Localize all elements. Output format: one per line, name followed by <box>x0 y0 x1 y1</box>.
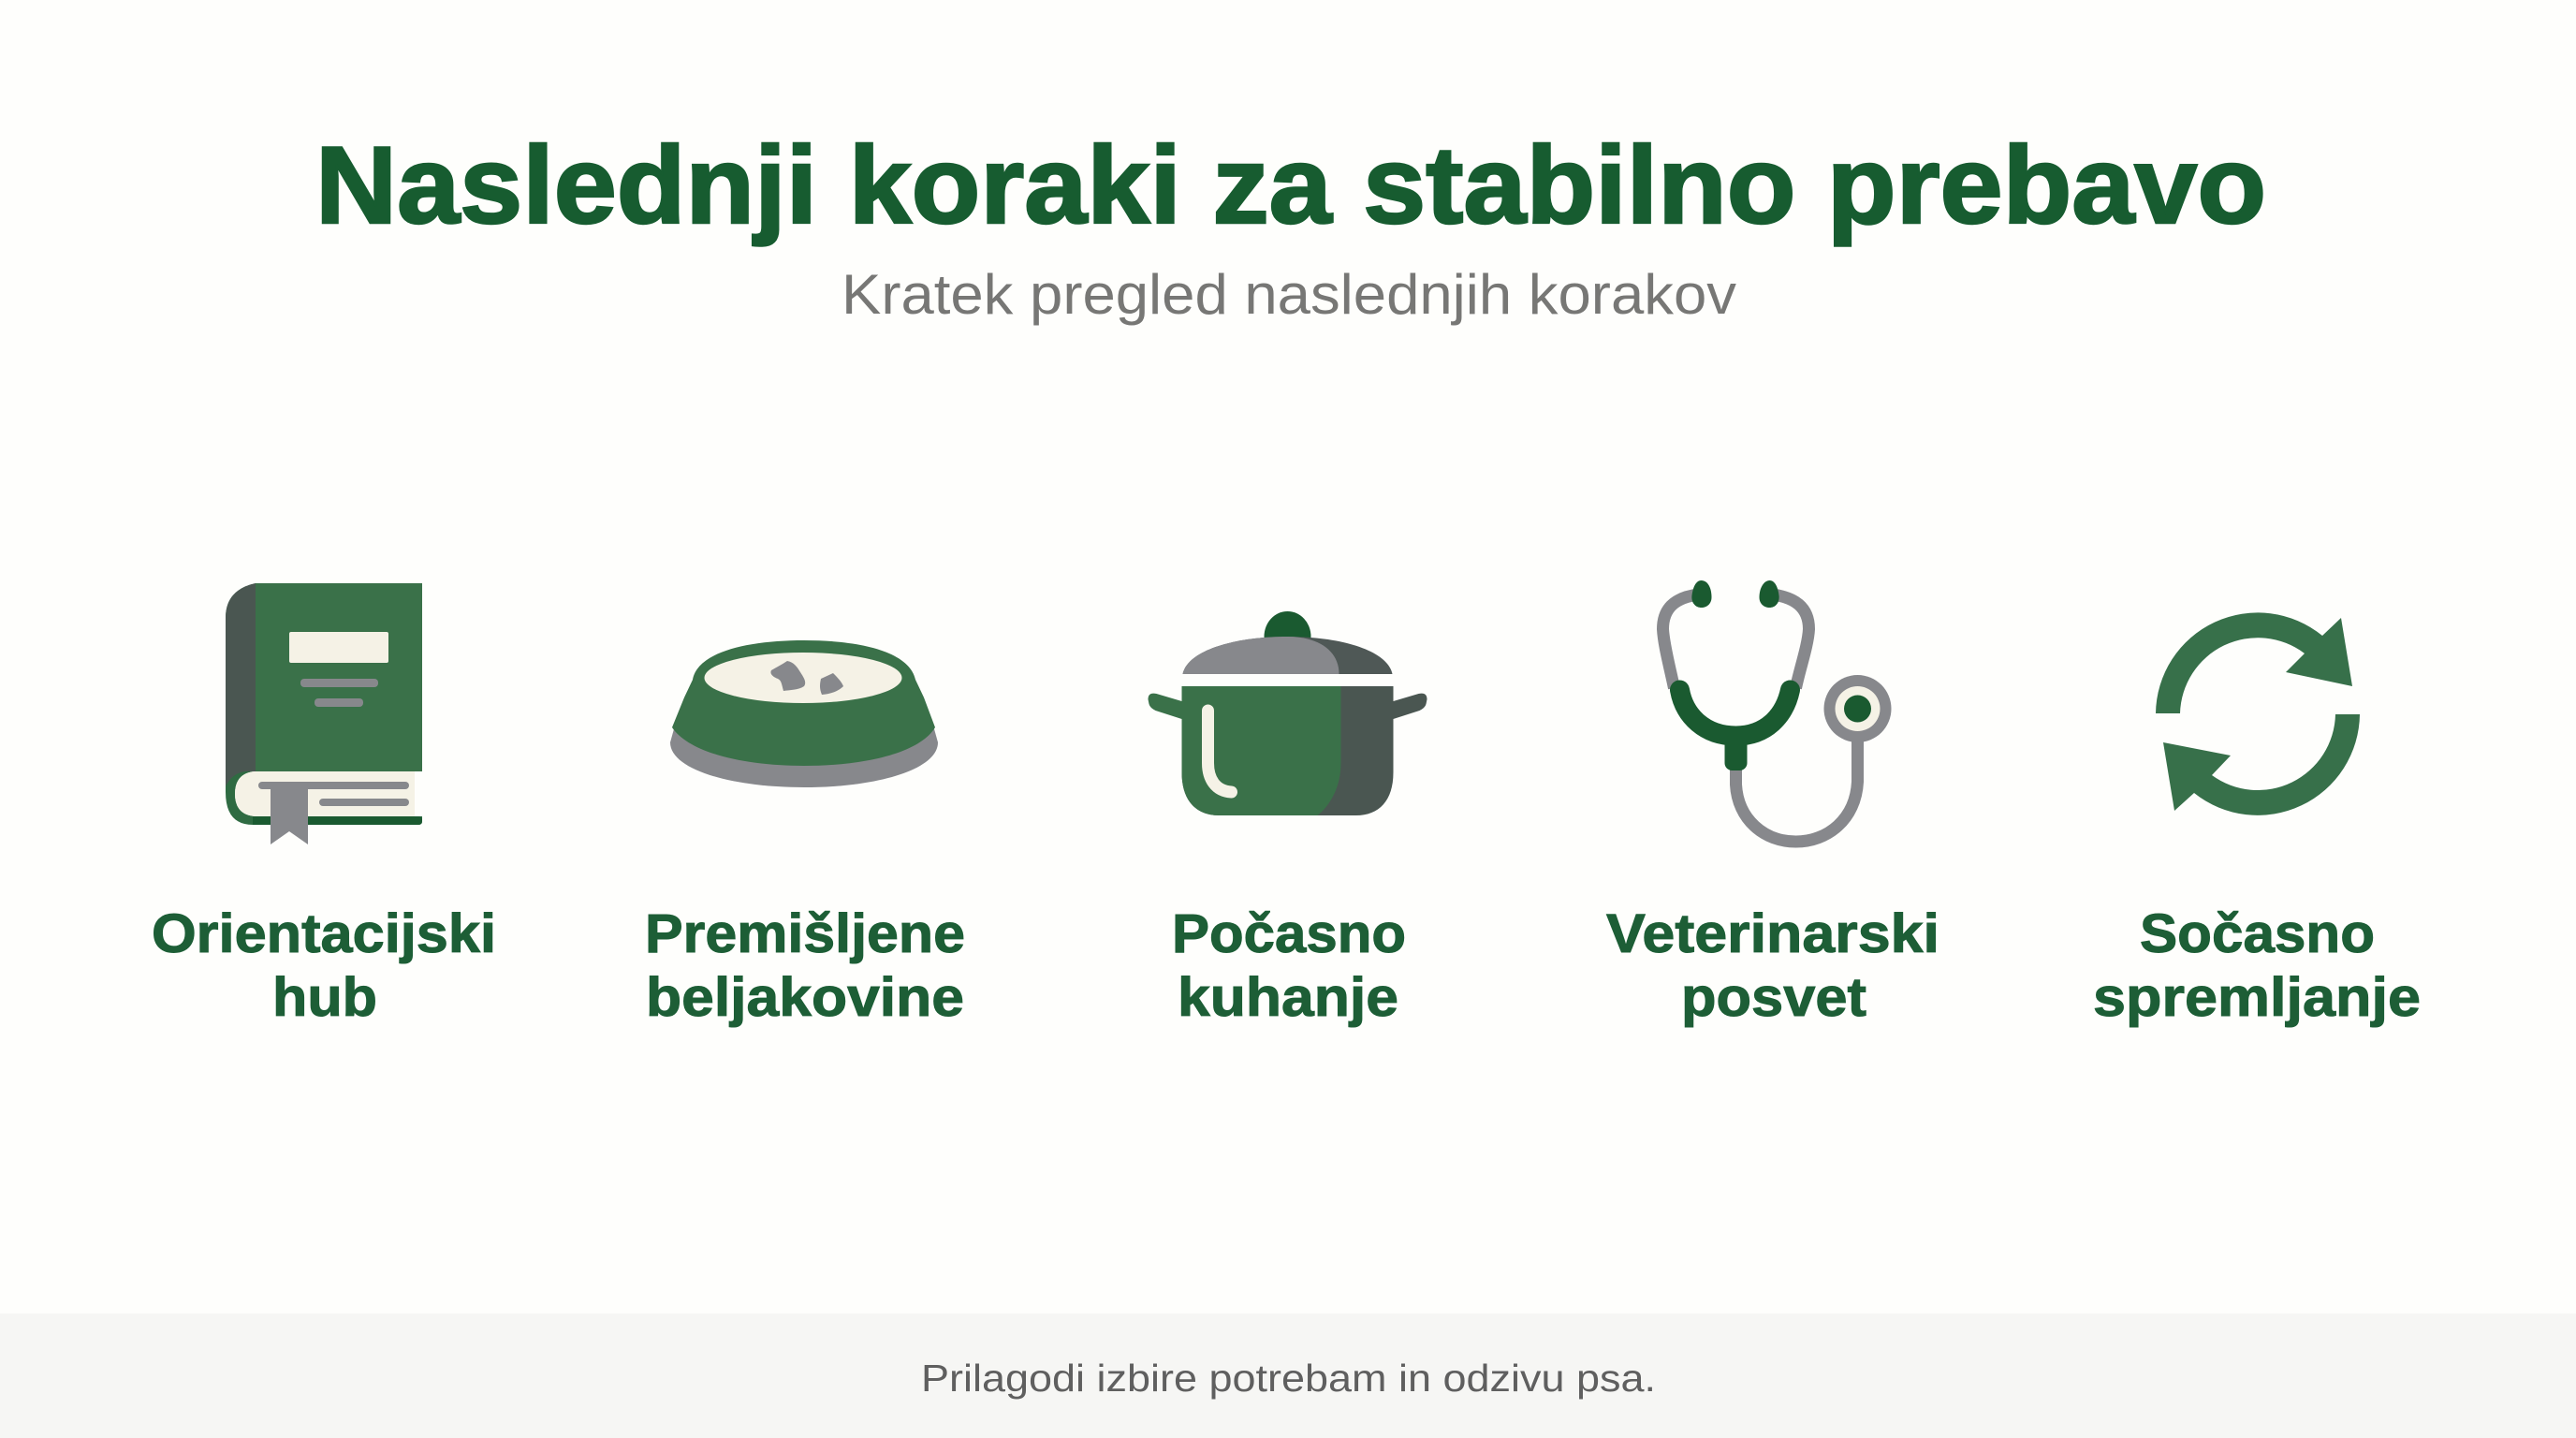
label: Počasno kuhanje: Počasno <box>1172 903 1406 964</box>
title: Naslednji koraki za stabilno prebavo <box>315 124 2266 246</box>
label: Premišljene beljakovine: beljakovine <box>646 967 964 1028</box>
icon: circular arrows <box>2156 612 2360 815</box>
label: Orientacijski hub: hub <box>272 967 377 1028</box>
subtitle: Kratek pregled naslednjih korakov <box>842 263 1736 326</box>
label: Premišljene beljakovine: Premišljene <box>645 903 965 964</box>
footer note: Prilagodi izbire potrebam in odzivu psa. <box>921 1357 1656 1400</box>
label: Orientacijski hub <box>152 903 496 1028</box>
label: Veterinarski posvet: Veterinarski <box>1606 903 1939 964</box>
label: Orientacijski hub: Orientacijski <box>152 903 496 964</box>
label: Veterinarski posvet <box>1606 903 1939 1028</box>
step: considered proteins <box>645 640 965 1028</box>
label: Premišljene beljakovine <box>645 903 965 1028</box>
icon: pot <box>1148 611 1427 815</box>
step: veterinary consultation <box>1606 580 1939 1028</box>
label: Sočasno spremljanje: Sočasno <box>2140 903 2375 964</box>
step: slow cooking <box>1148 611 1427 1028</box>
icon: book <box>226 583 422 844</box>
label: Sočasno spremljanje <box>2093 903 2421 1028</box>
label: Veterinarski posvet: posvet <box>1681 967 1866 1028</box>
label: Počasno kuhanje: kuhanje <box>1178 967 1398 1028</box>
step: concurrent monitoring <box>2093 612 2421 1028</box>
footer band <box>0 1313 2576 1438</box>
label: Sočasno spremljanje: spremljanje <box>2093 967 2421 1028</box>
icon: stethoscope <box>1662 580 1891 842</box>
label: Počasno kuhanje <box>1172 903 1406 1028</box>
step: orientation hub <box>152 583 496 1028</box>
icon: bowl <box>670 640 938 787</box>
